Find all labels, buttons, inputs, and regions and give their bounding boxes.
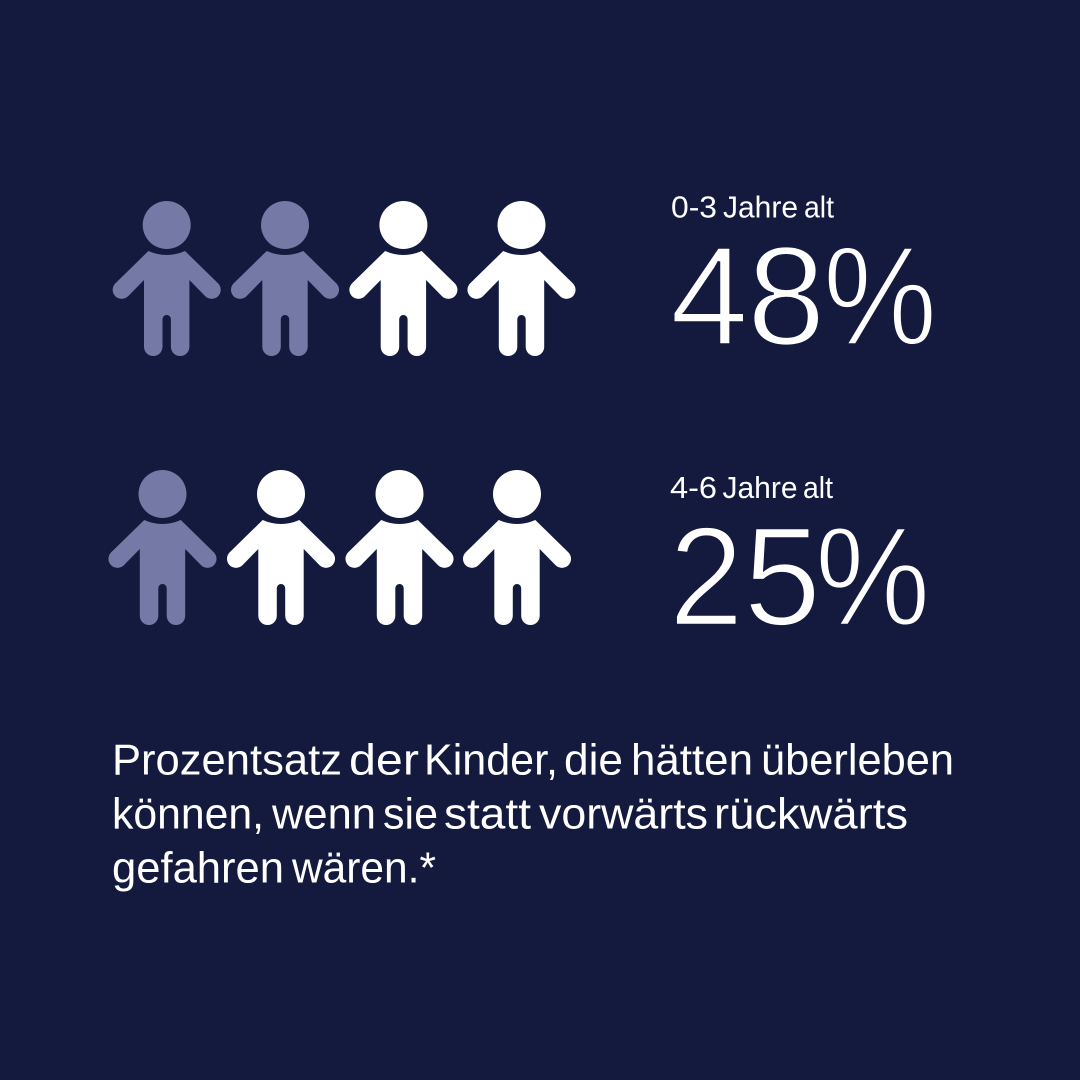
panel: age 0-3 row <box>113 190 937 375</box>
caption text: sie <box>383 790 438 838</box>
caption text: wenn <box>271 790 376 838</box>
label: 0-3 Jahre alt: Jahre <box>723 190 798 224</box>
stat: 48%: 4 <box>670 216 748 374</box>
caption text: gefahren <box>112 844 284 892</box>
caption text: wären.* <box>291 844 436 892</box>
icon: child muted 2 <box>231 201 339 356</box>
stat: 48%: % <box>823 217 937 375</box>
icon row: children 0-3 years <box>113 201 576 356</box>
icon: child white 3 <box>463 470 571 625</box>
icon: child white 1 <box>349 201 457 356</box>
caption text: Kinder, <box>424 736 558 784</box>
caption text: statt <box>444 790 531 838</box>
caption text: überleben <box>761 736 954 784</box>
label: 4-6 Jahre alt: 4-6 <box>670 470 717 505</box>
caption text: vorwärts <box>539 790 708 838</box>
icon: child white 1 <box>227 470 335 625</box>
caption text: die <box>564 736 623 784</box>
caption text: hätten <box>631 736 753 784</box>
stat: 25% <box>669 497 930 656</box>
icon row: children 4-6 years <box>108 470 571 625</box>
icon: child white 2 <box>345 470 454 625</box>
label: 4-6 Jahre alt: alt <box>803 470 833 505</box>
caption text: der <box>349 736 419 784</box>
caption text: Prozentsatz <box>112 736 342 784</box>
stat: 25%: 5 <box>744 497 821 655</box>
icon: child muted 1 <box>113 201 221 356</box>
icon: child muted 1 <box>108 470 217 625</box>
caption text <box>112 736 954 892</box>
stat: 48%: 8 <box>747 216 825 374</box>
label: 0-3 Jahre alt: 0-3 <box>671 190 717 224</box>
label: 0-3 Jahre alt: alt <box>804 190 834 224</box>
stat: 48% <box>670 216 937 375</box>
panel: age 4-6 row <box>108 470 930 656</box>
caption text: können, <box>112 790 264 838</box>
icon: child white 2 <box>467 201 576 356</box>
caption text: rückwärts <box>714 790 908 838</box>
label: 4-6 Jahre alt: Jahre <box>722 470 798 505</box>
stat: 25%: % <box>815 497 930 655</box>
stat: 25%: 2 <box>669 499 743 656</box>
